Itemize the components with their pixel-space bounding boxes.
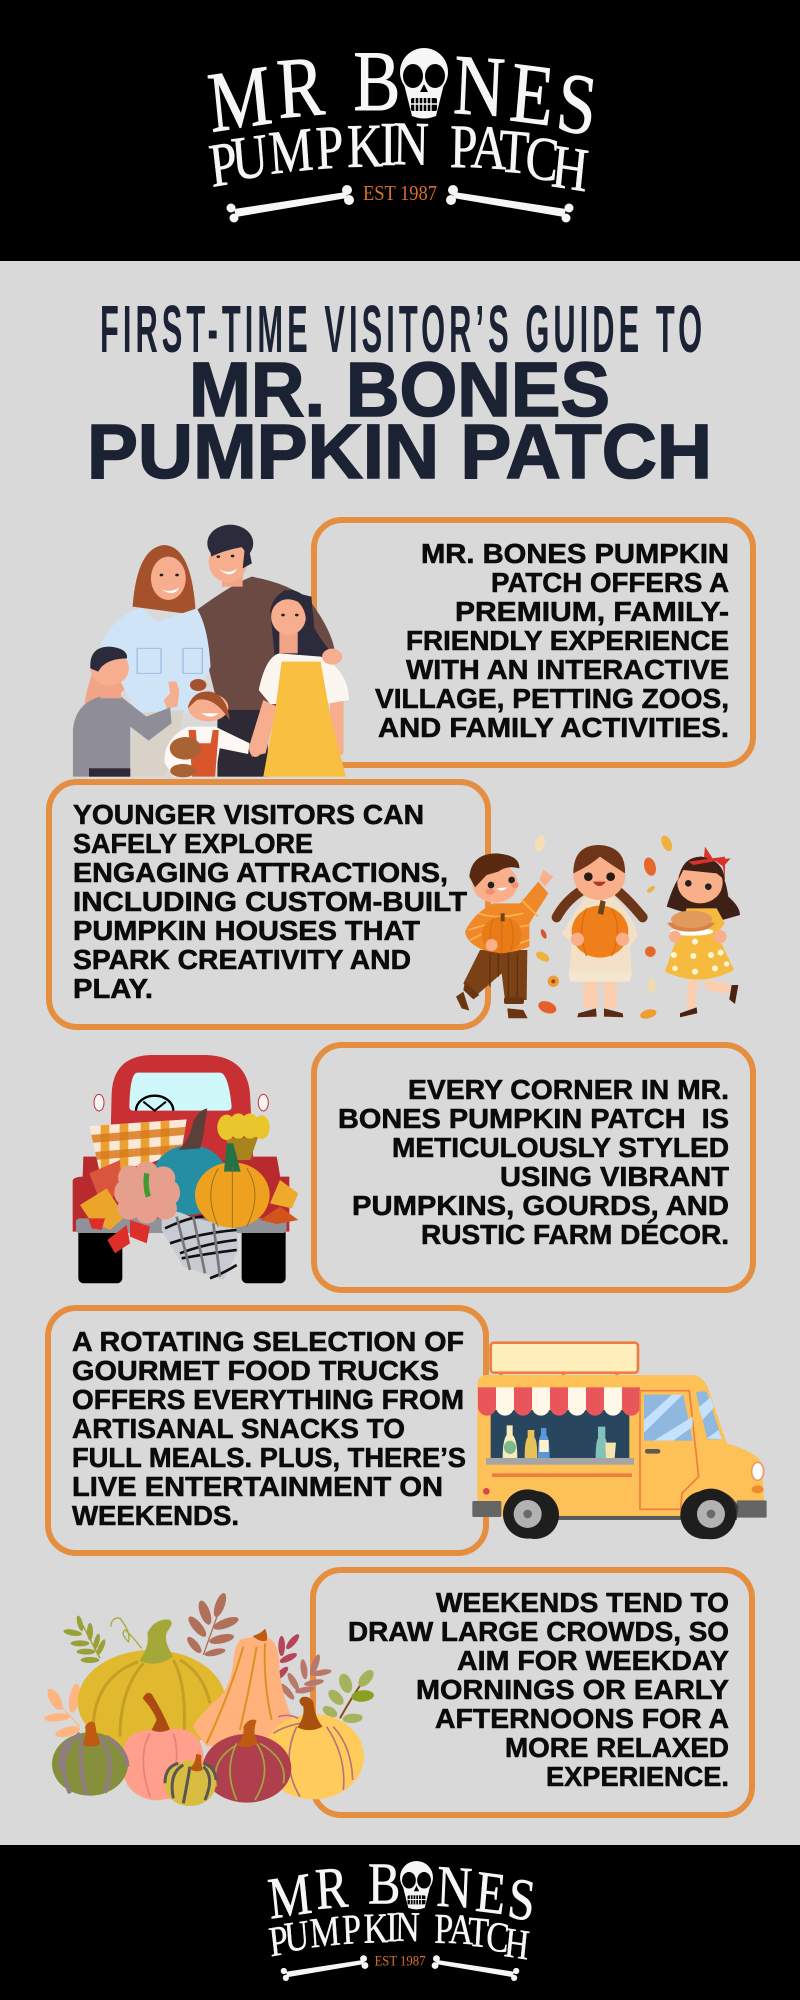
falling leaves — [533, 834, 674, 1020]
panel text: VILLAGE, PETTING ZOOS, — [375, 683, 729, 714]
panel text — [348, 1587, 729, 1792]
panel text: PUMPKIN HOUSES THAT — [73, 915, 420, 946]
panel text: SPARK CREATIVITY AND — [73, 944, 411, 975]
footer est 1987 tag: EST 1987 — [375, 1954, 425, 1970]
illustration: family — [73, 525, 349, 777]
footer logo — [265, 1792, 539, 1981]
panel: younger visitors — [49, 782, 740, 1027]
panel outline — [314, 1045, 753, 1290]
panel text — [72, 1326, 466, 1531]
panel text: INCLUDING CUSTOM-BUILT — [73, 886, 467, 917]
title line 3: PUMPKIN PATCH — [87, 409, 712, 495]
panel text: MR. BONES PUMPKIN — [421, 538, 729, 569]
panel text: AIM FOR WEEKDAY — [457, 1645, 729, 1676]
title — [87, 293, 712, 495]
boy — [456, 853, 553, 1018]
panel text — [338, 1074, 729, 1250]
panel text: ENGAGING ATTRACTIONS, — [73, 857, 448, 888]
red pumpkin — [203, 1720, 291, 1803]
icon: skull — [400, 48, 448, 118]
panel text: PATCH OFFERS A — [491, 567, 729, 598]
pink pumpkin — [122, 1693, 204, 1800]
title line 1: FIRST-TIME VISITOR’S GUIDE TO — [100, 293, 702, 367]
panel text: RUSTIC FARM DÉCOR. — [421, 1219, 729, 1250]
girl with pumpkin — [557, 845, 643, 1017]
panel text: FRIENDLY EXPERIENCE — [406, 625, 729, 656]
panel text: MORE RELAXED — [505, 1732, 729, 1763]
foliage — [44, 1591, 376, 1739]
icon: right bone — [446, 185, 574, 222]
icon: footer right bone — [432, 1955, 519, 1981]
footer wordmark: Pumpkin Patch: PUMPKIN PATCH — [267, 1792, 531, 1969]
panel text: MORNINGS OR EARLY — [416, 1674, 729, 1705]
header logo — [204, 0, 602, 222]
panel outline — [49, 782, 488, 1027]
panel text: WEEKENDS TEND TO — [436, 1587, 729, 1618]
footer wordmark: Mr Bones: MR BONES — [265, 1844, 539, 1934]
panel text: WITH AN INTERACTIVE — [406, 654, 729, 685]
logo wordmark: Mr Bones: MR BONES — [204, 25, 602, 155]
panel text: OFFERS EVERYTHING FROM — [72, 1384, 464, 1415]
panel: food trucks — [48, 1308, 767, 1553]
panel text: PREMIUM, FAMILY- — [455, 596, 729, 627]
yellow pumpkin — [263, 1697, 364, 1799]
panel text: SAFELY EXPLORE — [73, 828, 313, 859]
panel text: USING VIBRANT — [500, 1161, 729, 1192]
large yellow pumpkin — [78, 1619, 226, 1753]
title line 2: MR. BONES — [189, 347, 610, 433]
panel text: AND FAMILY ACTIVITIES. — [378, 712, 729, 743]
panel: premium family experience — [73, 520, 753, 777]
illustration: pumpkin pile — [44, 1591, 376, 1806]
footer band — [0, 1845, 800, 2000]
panel text: GOURMET FOOD TRUCKS — [72, 1355, 439, 1386]
icon: footer skull — [400, 1861, 433, 1909]
panel text: DRAW LARGE CROWDS, SO — [348, 1616, 729, 1647]
panel: decor — [73, 1045, 753, 1290]
panel outline — [48, 1308, 486, 1553]
panel text: YOUNGER VISITORS CAN — [73, 799, 424, 830]
green pumpkin — [52, 1721, 128, 1796]
illustration: red truck with harvest — [73, 1055, 298, 1283]
small striped pumpkin — [164, 1754, 216, 1806]
illustration: children with pumpkins — [456, 834, 740, 1020]
panel: best time to visit — [44, 1570, 752, 1815]
panel text: PUMPKINS, GOURDS, AND — [352, 1190, 729, 1221]
panel text: LIVE ENTERTAINMENT ON — [72, 1471, 443, 1502]
panel text: ARTISANAL SNACKS TO — [72, 1413, 405, 1444]
est 1987 tag: EST 1987 — [363, 181, 437, 205]
girl with pie — [665, 847, 740, 1017]
scalloped pink pumpkin — [114, 1161, 180, 1224]
panel outline — [314, 520, 753, 765]
panel text: EVERY CORNER IN MR. — [408, 1074, 729, 1105]
panel text: BONES PUMPKIN PATCH IS — [338, 1103, 729, 1134]
icon: left bone — [226, 185, 354, 222]
header band — [0, 0, 800, 261]
panel text: WEEKENDS. — [72, 1500, 239, 1531]
panel text: METICULOUSLY STYLED — [392, 1132, 729, 1163]
panel text: PLAY. — [73, 973, 153, 1004]
panel outline — [313, 1570, 752, 1815]
tall orange gourd — [193, 1629, 293, 1747]
panel text — [375, 538, 729, 743]
icon: footer left bone — [281, 1955, 368, 1981]
panel text — [73, 799, 467, 1004]
panel text: FULL MEALS. PLUS, THERE’S — [72, 1442, 466, 1473]
panel text: EXPERIENCE. — [546, 1761, 729, 1792]
panel text: AFTERNOONS FOR A — [435, 1703, 729, 1734]
panel text: A ROTATING SELECTION OF — [72, 1326, 464, 1357]
illustration: food truck — [472, 1343, 767, 1539]
